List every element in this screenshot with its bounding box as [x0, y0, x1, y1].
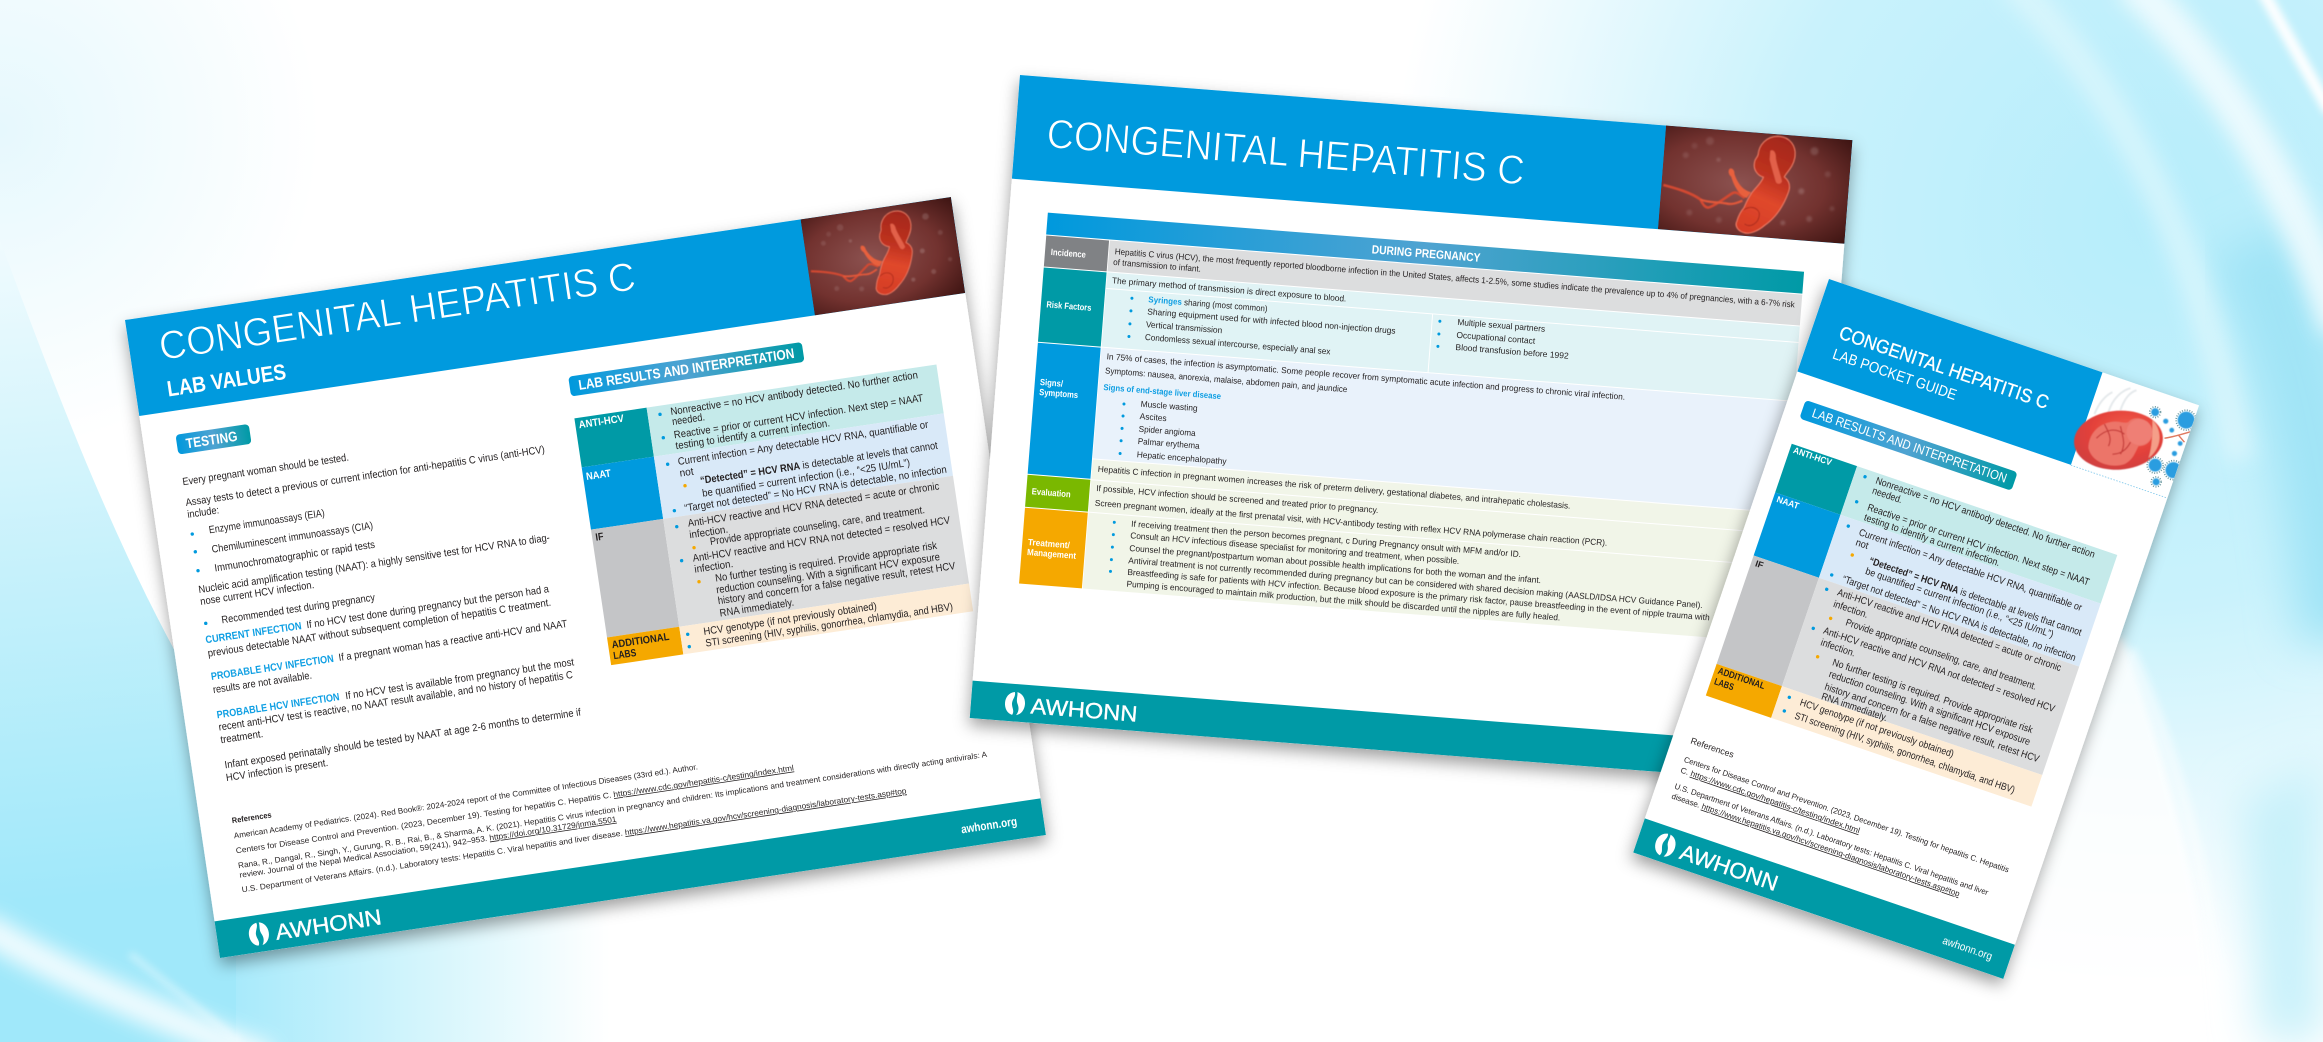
references: disease. https://www.hepatitis.va.gov/hcv/screening-diagnosis/laboratory-tests.asp#top [1670, 792, 1962, 899]
image: fetus [801, 197, 965, 315]
text block: testing: CURRENT INFECTION [205, 620, 302, 646]
table: during pregnancy: Blood transfusion before 1992 [1455, 342, 1569, 361]
table: during pregnancy: Incidence [1051, 247, 1086, 260]
references [1670, 736, 2017, 911]
table: lab results: ANTI-HCV [1792, 445, 1833, 467]
heading pill: testing: TESTING [185, 428, 239, 451]
text block: testing: Immunochromatographic or rapid tests [214, 539, 376, 574]
image: fetus in sac with virus particles [2070, 388, 2196, 498]
table: lab results: LABS [1713, 676, 1735, 693]
references: References [1689, 736, 1736, 760]
references: review. Journal of the Nepal Medical Association, 59(241), 942–953. https://doi.org/10.31729/jnma.5501 [239, 815, 618, 880]
table: during pregnancy: of transmission to infant. [1113, 257, 1201, 274]
table: lab results: No further testing is required. Provide appropriate risk [1831, 657, 2035, 736]
table: lab results: ANTI-HCV [578, 413, 625, 431]
table: lab results: ADDITIONAL [611, 631, 671, 651]
table: lab results: RNA immediately. [719, 597, 795, 620]
table: during pregnancy: Pumping is encouraged to maintain milk production, but the milk should be discarded until the nipples are fully healed. [1126, 579, 1561, 623]
table: lab results: STI screening (HIV, syphilis, gonorrhea, chlamydia, and HBV) [1793, 711, 2016, 796]
table: during pregnancy: Hepatic encephalopathy [1136, 449, 1228, 466]
table: lab results: No further testing is required. Provide appropriate risk [714, 540, 938, 585]
table: during pregnancy: Hepatitis C virus (HCV), the most frequently reported bloodborne infection in the United States, affects 1-2.5%, some studies indicate the prevalence up to 4% of pregnancies, with a 6-7% risk [1114, 246, 1796, 310]
table: lab results: Anti-HCV reactive and HCV RNA not detected = resolved HCV [1822, 626, 2056, 715]
footer band: AWHONN [274, 904, 383, 945]
header band: LAB POCKET GUIDE [1830, 346, 1959, 404]
text block: testing: PROBABLE HCV INFECTION [210, 653, 335, 683]
table: lab results: STI screening (HIV, syphilis, gonorrhea, chlamydia, and HBV) [705, 601, 954, 650]
text block: testing: Chemiluminescent immunoassays (CIA) [211, 520, 374, 556]
table: during pregnancy: Signs/ [1040, 377, 1064, 389]
table: during pregnancy: Palmar erythema [1137, 436, 1200, 451]
text block: testing: previous detectable NAAT without subsequent completion of hepatitis C treatment. [207, 597, 552, 660]
table: lab results: “Target not detected” = No HCV RNA is detectable, no infection [1841, 574, 2077, 664]
table: lab results: history and concern for a false negative result, retest HCV [1823, 682, 2041, 765]
table: during pregnancy: DURING PREGNANCY [1371, 242, 1481, 265]
image: fetus [1658, 126, 1852, 244]
table: during pregnancy: Signs of end-stage liver disease [1103, 382, 1222, 401]
footer band: AWHONN [1030, 693, 1138, 727]
text block: testing: PROBABLE HCV INFECTION [216, 691, 340, 721]
table: lab results: ADDITIONAL [1716, 666, 1766, 692]
footer band: awhonn.org [960, 814, 1018, 836]
table: during pregnancy: Spider angioma [1138, 424, 1196, 438]
heading pill: testing [175, 424, 252, 455]
table: during pregnancy [1019, 213, 1804, 643]
table: lab results: infection. [689, 524, 729, 541]
text block: testing: results are not available. [212, 670, 313, 696]
table: lab results: Reactive = prior or current HCV infection. Next step = NAAT [1866, 502, 2091, 588]
references: Centers for Disease Control and Prevention. (2023, December 19). Testing for hepatitis C. Hepatitis [1683, 755, 2010, 874]
heading pill: lab results: LAB RESULTS AND INTERPRETATION [1810, 405, 2009, 486]
header band [1012, 75, 1852, 244]
table: lab results: needed. [671, 411, 706, 428]
references: American Academy of Pediatrics. (2024). Red Book®: 2024-2024 report of the Committee of Infectious Diseases (33rd ed.). Author. [233, 762, 698, 840]
table: during pregnancy: Treatment/ [1028, 537, 1071, 550]
table: during pregnancy: Condomless sexual intercourse, especially anal sex [1145, 332, 1331, 356]
references: C. https://www.cdc.gov/hepatitis-c/testing/index.html [1679, 766, 1861, 835]
references: U.S. Department of Veterans Affairs. (n.d.). Laboratory tests: Hepatitis C. Viral hepatitis and liver disease. https://www.hepatitis.va.gov/hcv/screening-diagnosis/laboratory-tests.asp#top [241, 786, 908, 894]
header band [1797, 279, 2103, 465]
table: lab results: NAAT [1775, 494, 1801, 511]
sheet: Lab Values [125, 197, 1046, 958]
table: during pregnancy: Antiviral treatment is not currently recommended during pregnancy but can be considered with shared decision making (AASLD/IDSA HCV Guidance Panel). [1128, 555, 1703, 610]
table: lab results: Nonreactive = no HCV antibody detected. No further action [670, 369, 919, 418]
table: lab results: HCV genotype (if not previously obtained) [1798, 697, 1955, 760]
table: lab results: reduction counseling. With a significant HCV exposure [1827, 669, 2032, 748]
footer band [970, 681, 1805, 783]
table: lab results [574, 364, 973, 665]
table: during pregnancy: Hepatitis C infection in pregnant women increases the risk of preterm delivery, gestational diabetes, and intrahepatic cholestasis. [1097, 464, 1571, 511]
references [231, 705, 992, 894]
text block: testing: treatment. [220, 728, 264, 746]
text block: testing: Every pregnant woman should be tested. [182, 452, 350, 488]
table: lab results: Nonreactive = no HCV antibody detected. No further action [1874, 476, 2096, 561]
footer band: awhonn.org [1941, 935, 1994, 963]
sheet: During Pregnancy [970, 75, 1852, 783]
table: lab results: “Detected” = HCV RNA is detectable at levels that cannot [699, 440, 939, 487]
table: lab results: Current infection = Any detectable HCV RNA, quantifiable or [677, 419, 930, 468]
table: during pregnancy: Breastfeeding is safe for patients with HCV infection. Because blood exposure is the primary risk factor, pause breastfeeding in the event of nipple trauma with [1127, 567, 1710, 622]
table: lab results: LABS [613, 647, 637, 662]
table: lab results: Provide appropriate counseling, care, and treatment. [1844, 617, 2038, 693]
footer band [1633, 818, 2015, 979]
table: during pregnancy: If receiving treatment then the person becomes pregnant, c During Pregnancy onsult with MFM and/or ID. [1131, 519, 1521, 559]
heading pill: lab results: LAB RESULTS AND INTERPRETATION [577, 345, 795, 393]
table: during pregnancy: Sharing equipment used for with infected blood non-injection drugs [1147, 306, 1396, 336]
table: lab results: “Target not detected” = No HCV RNA is detectable, no infection [684, 464, 948, 515]
table: lab results: be quantified = current infection (i.e., “<25 IU/mL”) [1864, 566, 2055, 641]
table: during pregnancy: Symptoms: nausea, anorexia, malaise, abdomen pain, and jaundice [1105, 365, 1348, 394]
table: lab results: infection. [1832, 599, 1869, 621]
table: lab results: Provide appropriate counseling, care, and treatment. [709, 504, 926, 548]
table: during pregnancy: In 75% of cases, the infection is asymptomatic. Some people recover from symptomatic acute infection and progress to chronic viral infection. [1106, 351, 1626, 402]
table: lab results: infection. [694, 558, 734, 576]
table: lab results: “Detected” = HCV RNA is detectable at levels that cannot [1867, 556, 2083, 639]
references: U.S. Department of Veterans Affairs. (n.d.). Laboratory tests: Hepatitis C. Viral hepatitis and liver [1673, 782, 1990, 897]
text block: testing: Enzyme immunoassays (EIA) [208, 507, 326, 536]
table: during pregnancy: Muscle wasting [1140, 399, 1198, 413]
text block: testing: Assay tests to detect a previous or current infection for anti-hepatitis C virus (anti-HCV) [185, 444, 546, 509]
text block: testing: Recommended test during pregnancy [221, 591, 376, 626]
table: during pregnancy: Risk Factors [1046, 299, 1092, 313]
text block: testing [181, 423, 586, 784]
text block: testing: HCV infection is present. [225, 757, 329, 784]
table: during pregnancy: Syringes sharing (most common) [1148, 294, 1268, 314]
text block: testing: include: [187, 504, 220, 521]
table: during pregnancy: Management [1027, 547, 1076, 561]
table: lab results: IF [595, 531, 605, 544]
table: during pregnancy: Occupational contact [1456, 330, 1536, 346]
text block: testing: Infant exposed perinatally should be tested by NAAT at age 2-6 months to determine if [224, 706, 582, 771]
text block: testing: If no HCV test is available from pregnancy but the most [345, 656, 575, 702]
references: References [231, 810, 273, 825]
table: during pregnancy: Symptoms [1039, 387, 1079, 400]
table: during pregnancy: Screen pregnant women, ideally at the first prenatal visit, with HCV-antibody testing with reflex HCV RNA polymerase chain reaction (PCR). [1095, 498, 1608, 548]
header band [125, 197, 965, 416]
footer band: AWHONN [1677, 839, 1781, 896]
table: lab results: testing to identify a current infection. [1862, 512, 2001, 569]
table: lab results: IF [1754, 558, 1765, 571]
table: during pregnancy: Evaluation [1031, 486, 1071, 499]
table: lab results: NAAT [585, 467, 612, 483]
table: lab results: testing to identify a current infection. [675, 417, 831, 452]
table: lab results: Anti-HCV reactive and HCV RNA not detected = resolved HCV [692, 514, 951, 565]
header band: CONGENITAL HEPATITIS C [156, 255, 638, 369]
text block: testing: If no HCV test done during pregnancy but the person had a [306, 583, 550, 631]
table: during pregnancy: Consult an HCV infectious disease specialist for monitoring and treatment, when possible. [1130, 530, 1460, 566]
header band: CONGENITAL HEPATITIS C [1045, 110, 1526, 194]
sheet: Lab Pocket Guide [1633, 265, 2226, 986]
table: during pregnancy: Counsel the pregnant/postpartum woman about possible health implications for both the woman and the infant. [1129, 543, 1542, 585]
table: lab results: Current infection = Any detectable HCV RNA, quantifiable or [1857, 527, 2084, 614]
footer band [215, 798, 1046, 958]
table: during pregnancy: Multiple sexual partners [1457, 317, 1546, 334]
table: lab results: not [1854, 537, 1870, 552]
references: Centers for Disease Control and Prevention. (2023, December 19). Testing for hepatitis C. Hepatitis C. https://www.cdc.gov/hepatitis-c/testing/index.html [235, 763, 795, 855]
table: lab results: not [679, 466, 694, 480]
table: lab results: Anti-HCV reactive and HCV RNA detected = acute or chronic [1836, 587, 2063, 674]
table: lab results: needed. [1871, 486, 1904, 506]
table: during pregnancy: Vertical transmission [1146, 319, 1223, 335]
table: during pregnancy: Ascites [1139, 411, 1167, 423]
text block: testing: recent anti-HCV test is reactive, no NAAT result available, and no history of hepatitis C [218, 669, 574, 734]
text block: testing: Nucleic acid amplification testing (NAAT): a highly sensitive test for HCV RNA to diag- [198, 532, 551, 596]
table: lab results: Anti-HCV reactive and HCV RNA detected = acute or chronic [687, 480, 940, 530]
table: lab results: be quantified = current infection (i.e., “<25 IU/mL”) [701, 457, 911, 500]
table: during pregnancy: If possible, HCV infection should be screened and treated prior to pregnancy. [1096, 483, 1379, 515]
text block: testing: If a pregnant woman has a reactive anti-HCV and NAAT [338, 618, 569, 664]
header band: LAB VALUES [165, 359, 288, 401]
table: lab results: infection. [1819, 637, 1857, 660]
text block: testing: nose current HCV infection. [199, 579, 315, 608]
references: Rana, R., Dangal, R., Singh, Y., Gurung, R. B., Rai, B., & Sharma, A. K. (2021). Hepatitis C virus infection in pregnancy and children: Its implications and treatment considerations with directly acting antivirals: A [237, 750, 988, 870]
table: lab results: reduction counseling. With a significant HCV exposure [715, 551, 941, 596]
table: lab results: history and concern for a false negative result, retest HCV [717, 560, 956, 607]
table: lab results: RNA immediately. [1820, 691, 1889, 724]
table: lab results: HCV genotype (if not previously obtained) [703, 600, 878, 638]
table: lab results: Reactive = prior or current HCV infection. Next step = NAAT [673, 392, 925, 441]
header band: CONGENITAL HEPATITIS C [1836, 323, 2051, 414]
table: lab results [1706, 444, 2117, 807]
table: during pregnancy: The primary method of transmission is direct exposure to blood. [1112, 275, 1347, 304]
